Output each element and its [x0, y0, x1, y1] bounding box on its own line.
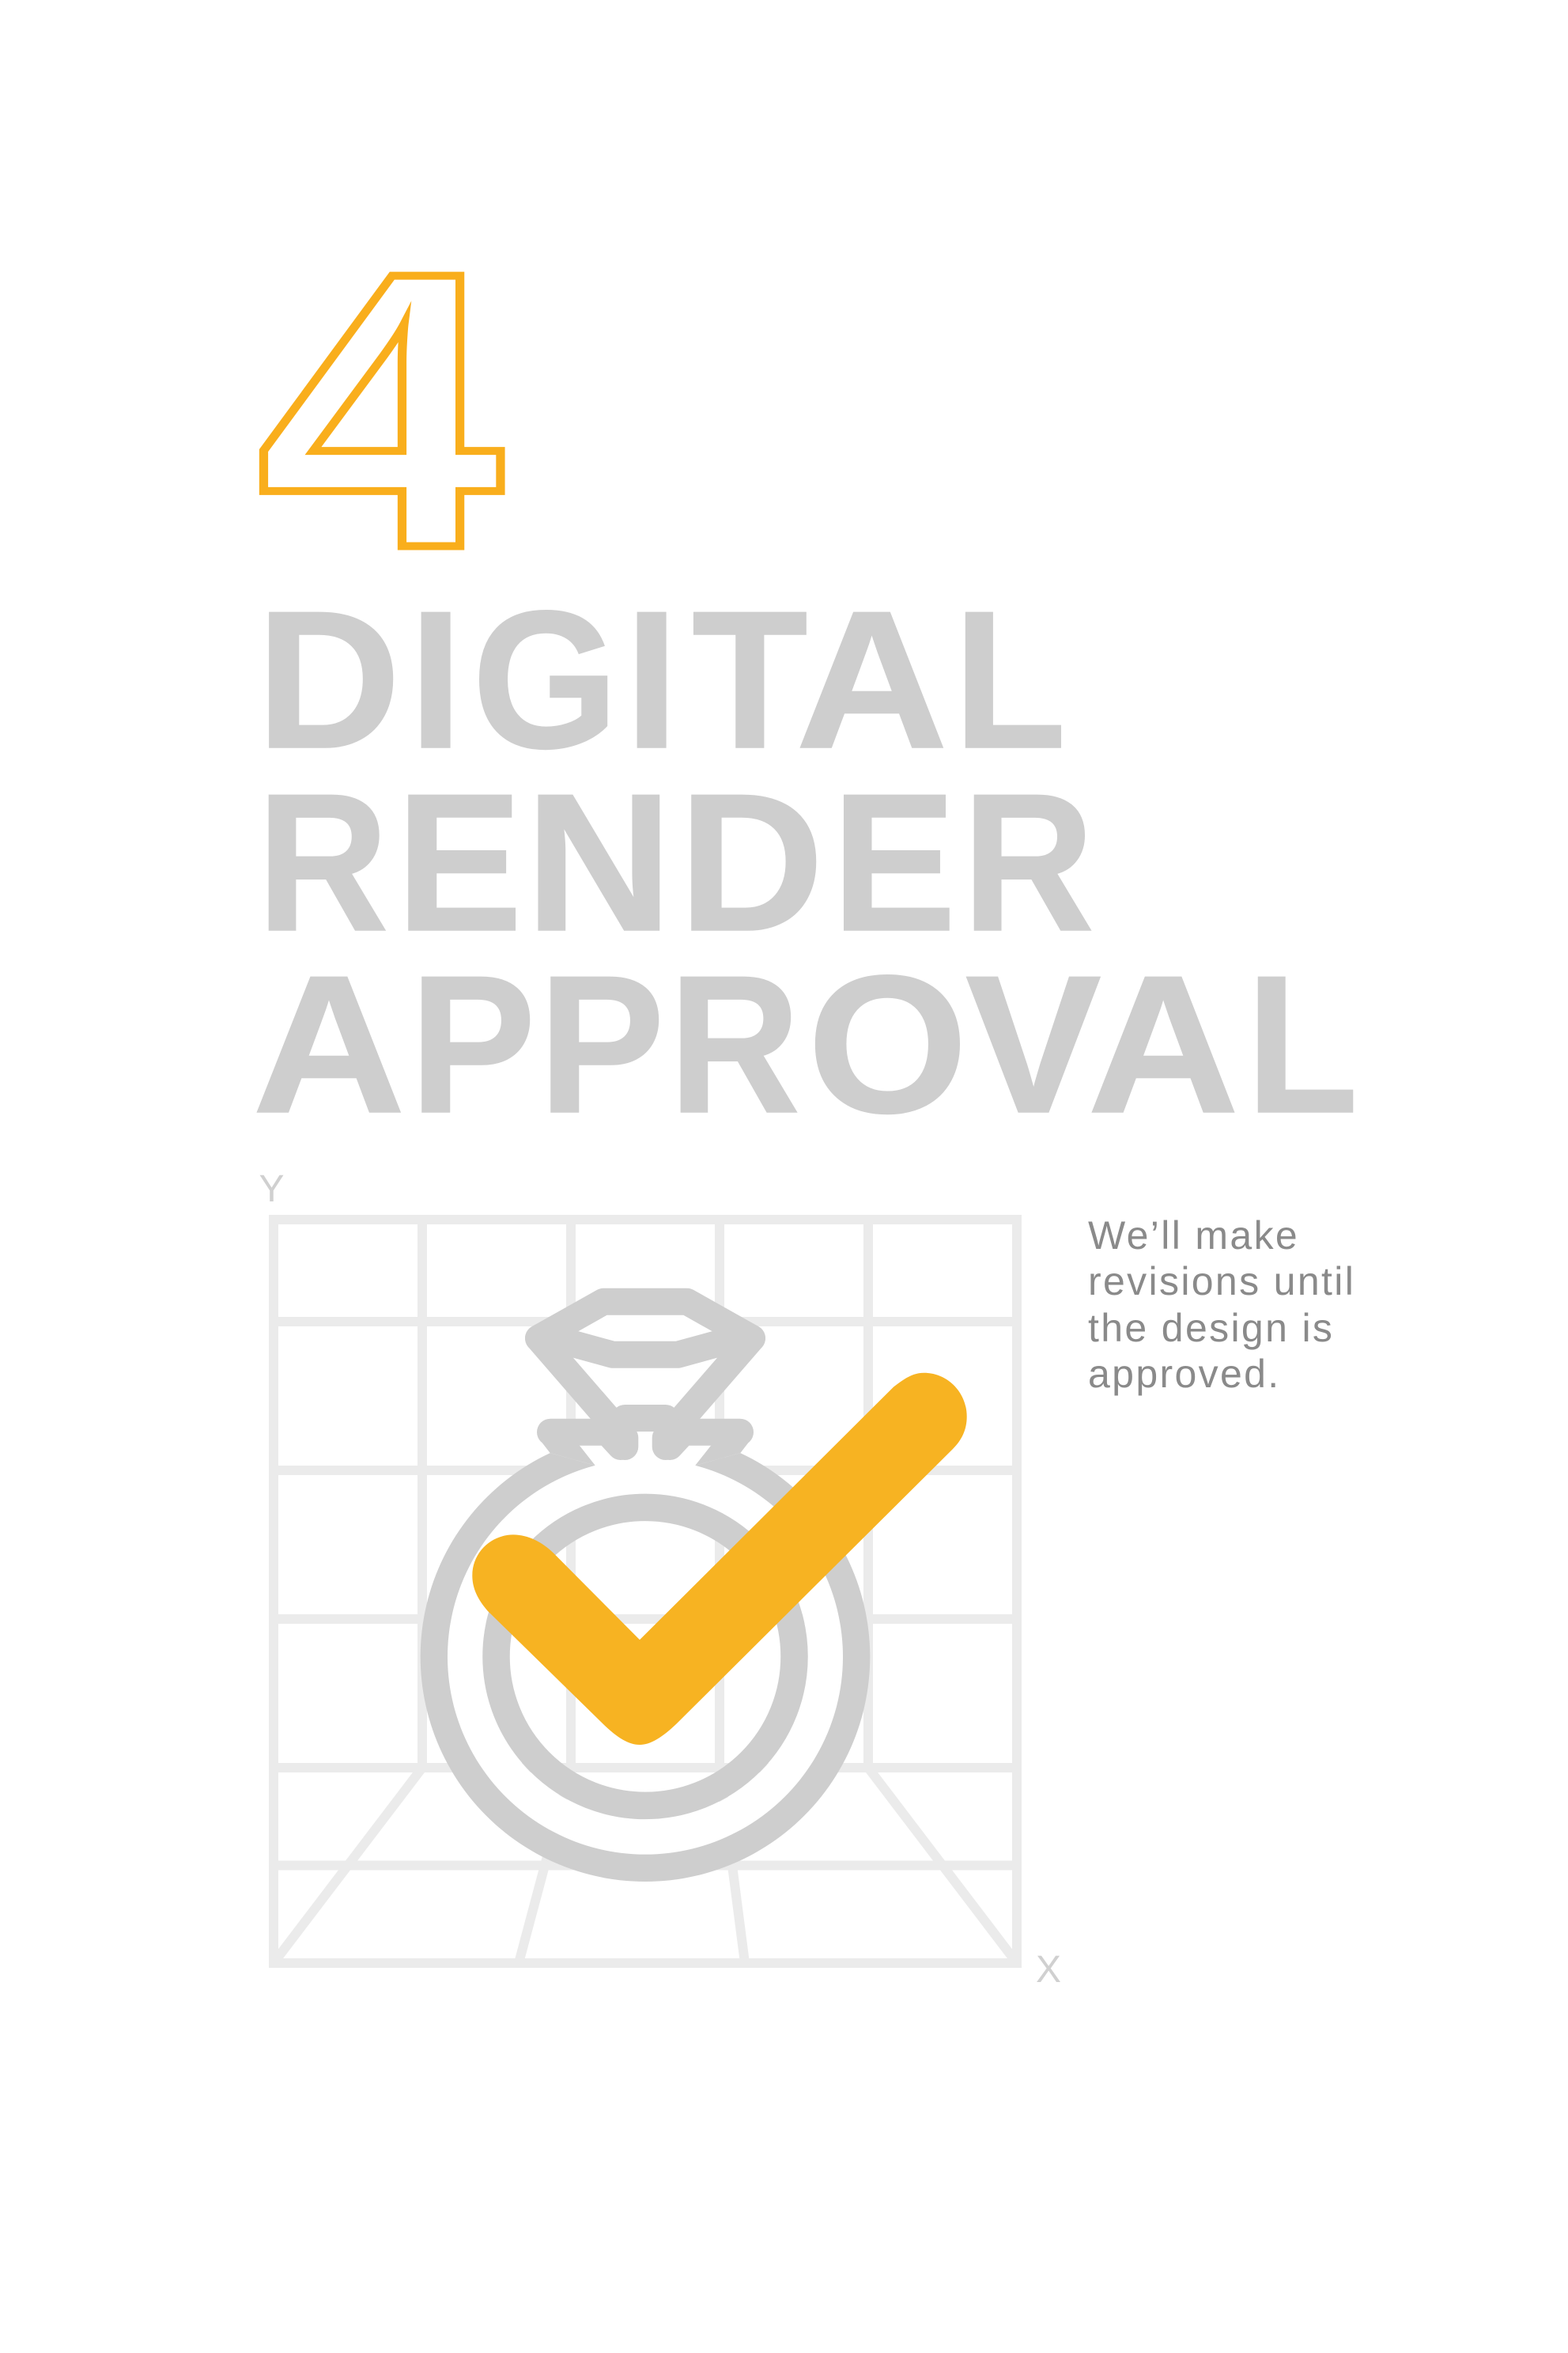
title line: APPROVAL: L — [1246, 934, 1358, 1154]
outer ring band — [421, 1453, 870, 1882]
description text: We’ll make — [1088, 1213, 1299, 1258]
title line: DIGITAL: I — [409, 569, 463, 789]
title line: RENDER: D — [678, 752, 824, 972]
title line: APPROVAL — [252, 934, 1358, 1154]
title line: DIGITAL: T — [692, 569, 808, 789]
icon: approval check mark — [472, 1373, 967, 1745]
title line: RENDER: R — [962, 752, 1094, 972]
step number 4 outline: 4 — [257, 191, 506, 630]
description text: the design is — [1088, 1306, 1334, 1350]
title line: APPROVAL: P — [410, 934, 535, 1154]
title line: DIGITAL: G — [472, 569, 618, 789]
title line: RENDER: E — [832, 752, 956, 972]
title: Digital Render Approval — [252, 569, 1358, 1154]
title line: APPROVAL: O — [807, 934, 968, 1154]
title line: DIGITAL: A — [795, 569, 948, 789]
title line: RENDER — [257, 752, 1094, 972]
description text — [1088, 1213, 1355, 1396]
ring shoulders joining the setting — [541, 1432, 750, 1466]
title line: RENDER: N — [525, 752, 673, 972]
perspective grid — [274, 1220, 1017, 1963]
axis label Y: Y — [259, 1168, 285, 1210]
title line: DIGITAL: D — [256, 569, 401, 789]
description text: revisions until — [1088, 1259, 1355, 1303]
title line: APPROVAL: A — [252, 934, 406, 1154]
icon: diamond ring — [421, 1302, 870, 1882]
title line: APPROVAL: P — [538, 934, 665, 1154]
title line: DIGITAL — [256, 569, 1066, 789]
title line: APPROVAL: R — [669, 934, 800, 1154]
title line: RENDER: E — [396, 752, 523, 972]
white gap between ring bands — [465, 1477, 826, 1837]
title line: APPROVAL: A — [1087, 934, 1239, 1154]
axis label X: X — [1036, 1949, 1061, 1991]
title line: APPROVAL: V — [965, 934, 1101, 1154]
inner ring band — [497, 1508, 794, 1806]
title line: DIGITAL: L — [954, 569, 1066, 789]
description text: approved. — [1088, 1352, 1281, 1396]
diamond setting — [538, 1302, 752, 1447]
title line: RENDER: R — [257, 752, 388, 972]
title line: DIGITAL: I — [625, 569, 678, 789]
